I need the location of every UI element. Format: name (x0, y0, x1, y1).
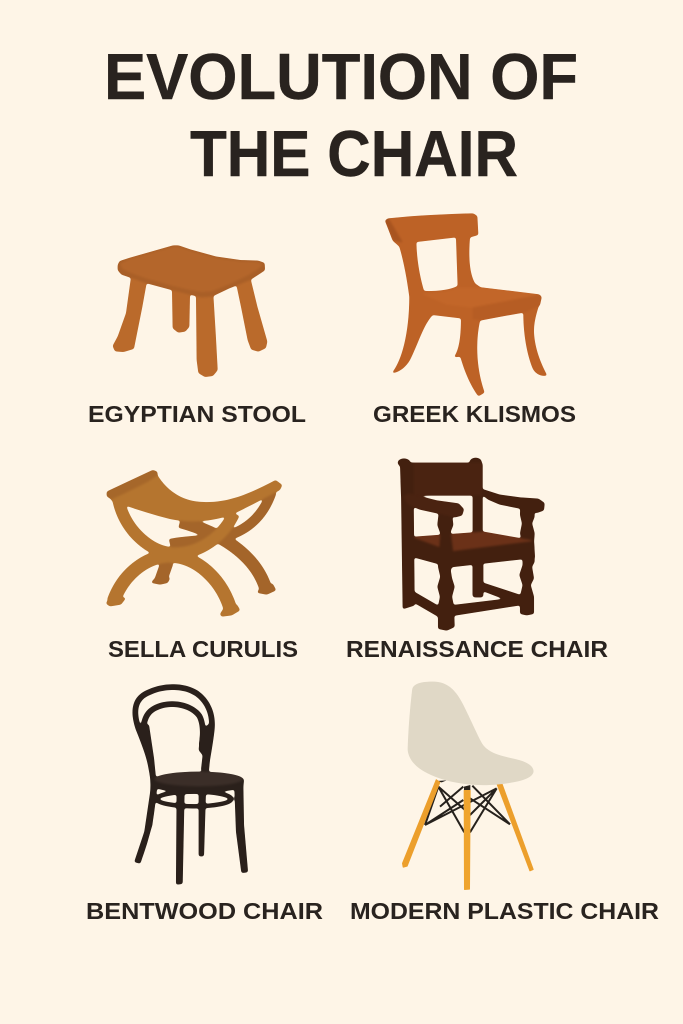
left front leg (438, 513, 454, 630)
right front leg (520, 505, 534, 615)
icon: renaissance chair (398, 458, 544, 630)
legs (403, 780, 440, 867)
label: egyptian stool: EGYPTIAN STOOL (88, 401, 306, 427)
back right post (470, 458, 483, 597)
stretchers (483, 583, 522, 605)
seat (415, 532, 531, 551)
back panel (401, 463, 482, 495)
icon: bentwood chair (135, 687, 247, 884)
wire base (425, 786, 510, 832)
icon: sella curulis (107, 470, 282, 616)
seat rail (413, 537, 534, 567)
icon: greek klismos (385, 213, 547, 396)
icon: egyptian stool (113, 246, 267, 376)
right arm (482, 490, 544, 512)
left arm (404, 494, 463, 517)
label: bentwood chair: BENTWOOD CHAIR (86, 898, 323, 924)
icon: modern plastic chair (403, 682, 534, 889)
shell (408, 682, 534, 785)
title: EVOLUTION OF (104, 40, 578, 113)
label: greek klismos: GREEK KLISMOS (373, 401, 576, 427)
label: sella curulis: SELLA CURULIS (108, 636, 298, 662)
title: THE CHAIR (190, 117, 518, 190)
label: modern plastic chair: MODERN PLASTIC CHAIR (350, 898, 659, 924)
back left post (401, 463, 414, 608)
label: renaissance chair: RENAISSANCE CHAIR (346, 636, 608, 662)
title (104, 40, 578, 190)
